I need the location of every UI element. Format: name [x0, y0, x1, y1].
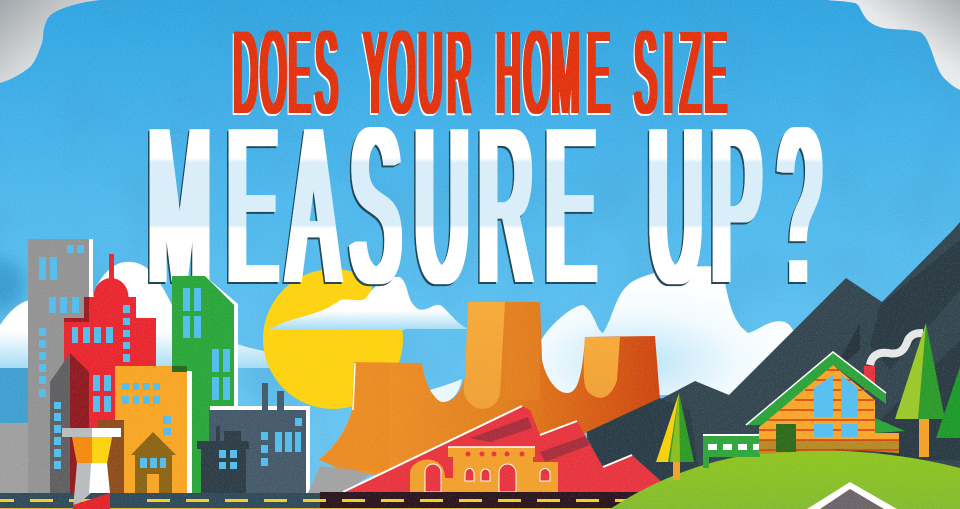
tree: small left	[656, 393, 694, 480]
icon: small brown house	[131, 432, 176, 493]
cabin door	[776, 424, 796, 452]
cloud: right	[535, 266, 795, 395]
sun	[263, 269, 403, 409]
mesa rock formation	[318, 302, 660, 475]
grey ground	[0, 423, 70, 493]
cloud: top right corner	[827, 0, 960, 90]
building: red tower	[64, 254, 156, 493]
sea band: left horizon	[0, 368, 60, 424]
green fence	[703, 434, 760, 468]
city skyline	[0, 239, 310, 493]
mountains	[587, 222, 960, 509]
building: green tower	[172, 276, 238, 493]
building: orange block	[98, 366, 192, 493]
side roof	[875, 418, 905, 433]
red hill with pueblo	[343, 406, 662, 493]
title line: does your home size: DOES YOUR HOME SIZE	[234, 8, 727, 139]
tree: right edge	[936, 367, 960, 438]
title	[149, 8, 820, 330]
tree: right large	[895, 323, 945, 457]
building: dark grey shadow block	[50, 353, 70, 493]
road	[0, 492, 660, 509]
building: dark house	[197, 426, 249, 493]
grey ground: centre	[308, 466, 373, 493]
building: dark factory	[209, 383, 310, 493]
lighthouse	[62, 428, 121, 509]
cabin siding stripes	[759, 370, 899, 450]
sky gap across sun	[270, 328, 405, 330]
cabin walls	[759, 365, 899, 454]
rooftop peeking at bottom	[807, 482, 897, 509]
cabin windows	[814, 375, 858, 437]
cloud: top left corner	[0, 0, 100, 83]
pueblo building	[410, 447, 558, 492]
building: grey tower	[28, 239, 93, 493]
cloud: middle	[276, 277, 468, 329]
title line: measure up: MEASURE UP?	[149, 82, 820, 330]
chimney	[864, 366, 875, 390]
cloud: left behind city	[0, 262, 335, 368]
chimney smoke	[870, 333, 923, 365]
red hill	[343, 406, 662, 493]
cloud fragment behind mesa	[430, 379, 462, 402]
cabin roof	[746, 352, 886, 425]
cabin house	[746, 333, 923, 454]
green hill	[610, 450, 960, 509]
